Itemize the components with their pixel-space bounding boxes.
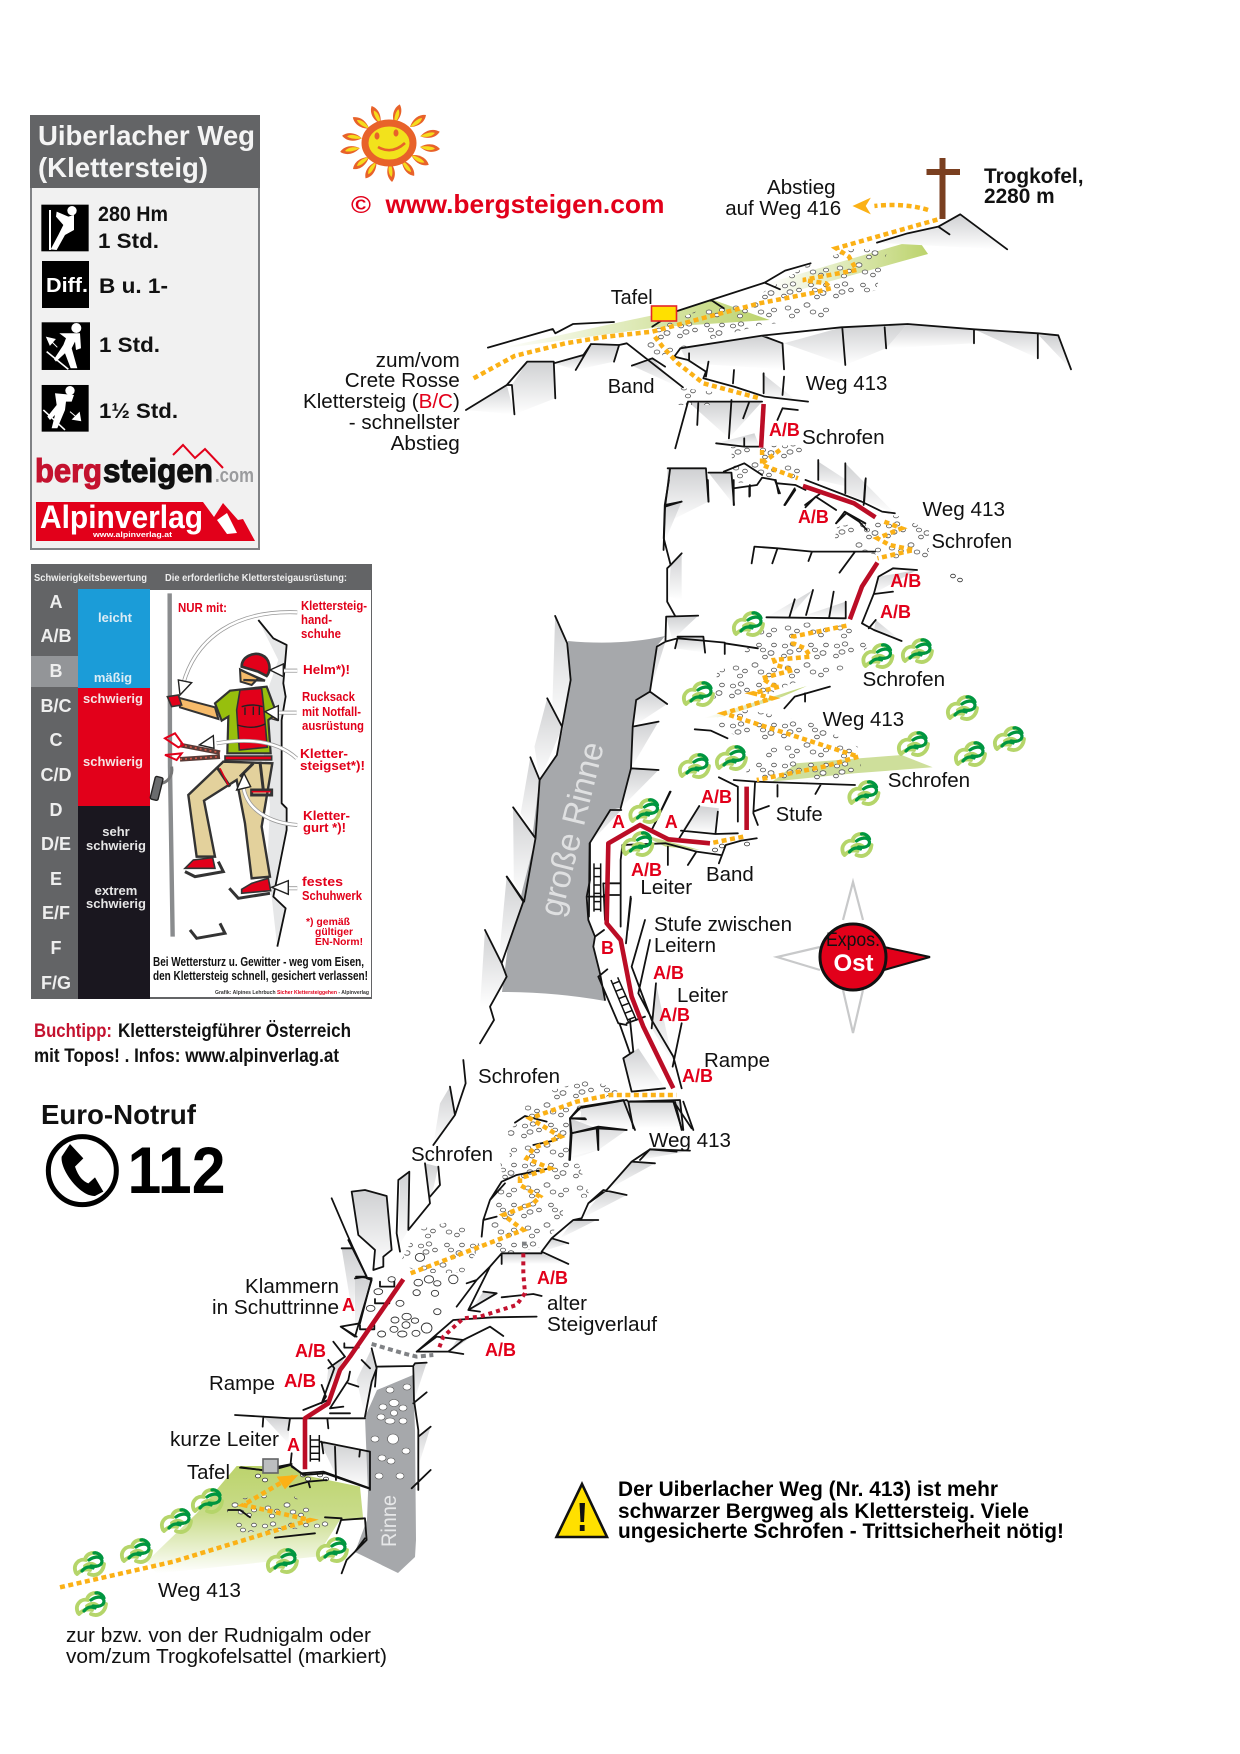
rock shading, bottom section bbox=[263, 1278, 431, 1490]
label: Stufe: Stufe bbox=[776, 803, 823, 826]
warning text: ungesicherte Schrofen - Trittsicherheit nötig! bbox=[618, 1520, 1064, 1543]
equipment labels: gültiger bbox=[315, 927, 353, 938]
icon: gray sign bbox=[263, 1459, 278, 1473]
equipment labels: NUR mit: bbox=[178, 600, 227, 615]
label: access note: zur bzw. von der Rudnigalm oder bbox=[66, 1624, 371, 1647]
logo: Alpinverlag bbox=[36, 499, 255, 541]
gully: große Rinne: große Rinne bbox=[532, 738, 611, 920]
label: Abstieg auf Weg 416: Abstieg bbox=[767, 176, 836, 199]
website link: © bbox=[351, 192, 371, 219]
rock wall bbox=[258, 620, 287, 947]
grade column: A/B bbox=[40, 626, 72, 646]
grade: A/B: A/B bbox=[295, 1341, 326, 1361]
arrows to equipment bbox=[178, 612, 297, 894]
via ferrata rungs bbox=[185, 862, 270, 938]
route: yellow path at start bbox=[60, 1475, 310, 1587]
icon: difficulty bbox=[42, 261, 89, 308]
icon: difficulty: Diff. bbox=[46, 275, 88, 297]
label: Schrofen: Schrofen bbox=[411, 1143, 493, 1166]
equipment area bbox=[150, 590, 371, 997]
book tip bbox=[34, 1021, 351, 1067]
label: Abstieg auf Weg 416: auf Weg 416 bbox=[725, 197, 841, 220]
lanyard bbox=[165, 733, 220, 760]
green meadow at start bbox=[147, 1466, 363, 1573]
label: Weg 413: Weg 413 bbox=[922, 498, 1005, 521]
equipment labels: Kletter- bbox=[300, 746, 348, 761]
large boulders in scree gully bbox=[366, 1253, 458, 1337]
label: Weg 413: Weg 413 bbox=[158, 1579, 241, 1602]
band: sehr / extrem schwierig: sehr bbox=[102, 824, 130, 839]
route: yellow path, lower sections bbox=[411, 1095, 677, 1273]
rock outlines and clamps, bottom section bbox=[235, 1240, 431, 1490]
icon: descent bbox=[42, 385, 89, 432]
rock outlines, upper section bbox=[466, 214, 1071, 550]
logo: bergsteigen.com: .com bbox=[215, 465, 254, 487]
rock outlines, base section bbox=[228, 1465, 368, 1573]
label: Stufe zwischen Leitern: Stufe zwischen bbox=[654, 913, 792, 936]
secured section main bbox=[607, 787, 747, 1088]
lower gully: Rinne bbox=[355, 1375, 416, 1573]
grade column: C/D bbox=[40, 765, 72, 785]
grade column: B bbox=[50, 661, 62, 681]
label: Crete Rosse connection: Klettersteig (B/C) bbox=[303, 390, 460, 413]
grade: A/B: A/B bbox=[798, 507, 829, 527]
label: access note: vom/zum Trogkofelsattel (markiert) bbox=[66, 1645, 387, 1668]
equipment labels: *) gemäß bbox=[306, 917, 350, 928]
label: Klammern in Schuttrinne: Klammern bbox=[245, 1275, 339, 1298]
grade: A/B: A/B bbox=[890, 571, 921, 591]
upper body bbox=[167, 654, 278, 760]
equipment labels: Kletter- bbox=[303, 808, 350, 823]
graphic credit: Grafik: Alpines Lehrbuch Sicher Klettersteiggehen - Alpinverlag bbox=[215, 990, 369, 996]
compass: exposure east: Expos. bbox=[826, 930, 880, 951]
steel cable bbox=[150, 593, 173, 937]
band: sehr / extrem schwierig: extrem bbox=[95, 883, 137, 898]
logo: Alpinverlag: Alpinverlag bbox=[40, 499, 203, 535]
label: Tafel: Tafel bbox=[187, 1461, 230, 1484]
icon: phone bbox=[48, 1137, 116, 1205]
logo: bergsteigen.com: berg bbox=[35, 452, 102, 489]
grade: A/B: A/B bbox=[631, 860, 662, 880]
label: Rampe: Rampe bbox=[704, 1049, 770, 1072]
grade: A: A bbox=[612, 812, 625, 832]
equipment labels: hand- bbox=[301, 612, 332, 627]
grade: A/B: A/B bbox=[659, 1005, 690, 1025]
warning text: Der Uiberlacher Weg (Nr. 413) ist mehr bbox=[618, 1478, 998, 1501]
storm warning: Bei Wettersturz u. Gewitter - weg vom Eisen, bbox=[153, 955, 364, 969]
label: Crete Rosse connection: Abstieg bbox=[391, 432, 460, 455]
grade column: A bbox=[50, 592, 62, 612]
label: Band upper: Band bbox=[608, 375, 654, 398]
label: Schrofen: Schrofen bbox=[932, 530, 1012, 553]
band: schwierig bbox=[78, 688, 150, 806]
label: Stufe zwischen Leitern: Leitern bbox=[654, 934, 716, 957]
grade: A/B: A/B bbox=[537, 1268, 568, 1288]
grade: A/B: A/B bbox=[769, 420, 800, 440]
route: yellow path to ledge bbox=[713, 837, 743, 843]
grade: A/B: A/B bbox=[653, 963, 684, 983]
bushes bbox=[75, 613, 1024, 1615]
band: sehr / extrem schwierig: schwierig bbox=[86, 838, 146, 853]
difficulty value: B u. 1- bbox=[99, 275, 168, 298]
equipment labels bbox=[178, 598, 367, 948]
label: Leiter: Leiter bbox=[677, 984, 728, 1007]
equipment labels: Rucksack bbox=[302, 689, 356, 704]
panel header bar bbox=[30, 115, 260, 188]
label: summit name: Trogkofel, bbox=[984, 165, 1084, 188]
band: schwierig: schwierig bbox=[83, 691, 143, 706]
label: Crete Rosse connection: zum/vom bbox=[376, 349, 460, 372]
panel base bbox=[31, 564, 372, 999]
header: difficulty rating: Schwierigkeitsbewertung bbox=[34, 572, 147, 584]
band: sehr / extrem schwierig: schwierig bbox=[86, 896, 146, 911]
gully: große Rinne bbox=[502, 636, 665, 1001]
topo map bbox=[60, 158, 1071, 1615]
label: Rampe: Rampe bbox=[209, 1372, 275, 1395]
band: leicht / mäßig bbox=[78, 589, 150, 688]
scree fields bbox=[227, 248, 962, 1533]
panel: difficulty scale and equipment bbox=[31, 564, 372, 999]
grade: A: A bbox=[665, 812, 678, 832]
ascent stats: 1 Std. bbox=[98, 230, 159, 253]
label: summit name: 2280 m bbox=[984, 185, 1055, 208]
lower gully: Rinne: Rinne bbox=[378, 1495, 401, 1547]
logo: bergsteigen.com: steigen bbox=[103, 452, 213, 489]
route: yellow path, summit section bbox=[474, 219, 938, 478]
grade: A: A bbox=[287, 1435, 300, 1455]
equipment labels: schuhe bbox=[301, 626, 341, 641]
panel frame bbox=[31, 116, 259, 549]
label: alter Steigverlauf: alter bbox=[547, 1292, 587, 1315]
grade: A/B: A/B bbox=[485, 1340, 516, 1360]
label: Weg 413: Weg 413 bbox=[823, 708, 904, 731]
label: Crete Rosse connection: Crete Rosse bbox=[345, 369, 460, 392]
legs bbox=[185, 762, 272, 893]
equipment labels: gurt *)! bbox=[303, 820, 346, 835]
website link: www.bergsteigen.com bbox=[384, 189, 664, 219]
equipment labels: EN-Norm! bbox=[315, 937, 363, 948]
equipment labels: Klettersteig- bbox=[301, 598, 367, 613]
grade: B: B bbox=[601, 938, 614, 958]
label: Schrofen: Schrofen bbox=[802, 426, 885, 449]
grade: A/B: A/B bbox=[880, 602, 911, 622]
rock shading, lower section bbox=[342, 1087, 682, 1353]
icon: climbing bbox=[41, 205, 89, 251]
equipment labels: ausrüstung bbox=[302, 718, 364, 733]
rock shading, upper section bbox=[466, 214, 1071, 523]
band: sehr / extrem schwierig bbox=[78, 806, 150, 999]
route: old path (dotted) bbox=[372, 1242, 527, 1357]
label: Weg 413: Weg 413 bbox=[649, 1129, 731, 1152]
logo: Alpinverlag: www.alpinverlag.at bbox=[92, 530, 173, 539]
grade column: F bbox=[50, 938, 62, 958]
secured section middle bbox=[850, 563, 877, 619]
book tip: mit Topos! . Infos: www.alpinverlag.at bbox=[34, 1046, 340, 1067]
grade: A/B: A/B bbox=[284, 1371, 316, 1391]
rock shading, lower-middle section bbox=[480, 877, 690, 1160]
label: alter Steigverlauf: Steigverlauf bbox=[547, 1313, 657, 1336]
secured section upper bbox=[761, 404, 875, 517]
compass: exposure east: Ost bbox=[833, 950, 874, 977]
summit cross bbox=[926, 158, 960, 219]
ladders bbox=[594, 863, 637, 1023]
grade column: B/C bbox=[40, 696, 72, 716]
rock shading, middle section bbox=[513, 502, 917, 897]
warning text: schwarzer Bergweg als Klettersteig. Viele bbox=[618, 1500, 1029, 1523]
route: yellow path, middle section bbox=[724, 522, 914, 780]
equipment labels: Helm*)! bbox=[303, 662, 350, 677]
secured section lower bbox=[305, 1279, 403, 1469]
logo: bergsteigen.com bbox=[35, 445, 254, 489]
label: Tafel top: Tafel bbox=[611, 286, 653, 309]
rock outlines, lower-middle section bbox=[480, 792, 693, 1160]
grade column: E/F bbox=[42, 903, 70, 923]
equipment labels: steigset*)! bbox=[300, 758, 365, 773]
band: leicht / mäßig: leicht bbox=[98, 610, 133, 625]
grade: A/B: A/B bbox=[682, 1066, 713, 1086]
label: Schrofen: Schrofen bbox=[888, 769, 970, 792]
label: Schrofen: Schrofen bbox=[478, 1065, 560, 1088]
rock outlines, lower section bbox=[332, 1060, 692, 1354]
icon: yellow sign bbox=[652, 306, 676, 321]
book tip: Klettersteigführer Österreich bbox=[118, 1021, 351, 1042]
icon: approach bbox=[42, 322, 90, 370]
grade column: E bbox=[50, 869, 62, 889]
grade: A: A bbox=[342, 1295, 355, 1315]
emergency number: 112 bbox=[128, 1133, 226, 1207]
book tip: Buchtipp: bbox=[34, 1021, 112, 1042]
label: Leiter: Leiter bbox=[640, 876, 692, 899]
panel title: (Klettersteig) bbox=[38, 152, 208, 183]
grade column: D bbox=[50, 800, 62, 820]
label: Schrofen: Schrofen bbox=[862, 668, 945, 691]
band: schwierig: schwierig bbox=[83, 754, 143, 769]
equipment labels: festes bbox=[302, 874, 343, 889]
panel: route summary bbox=[30, 115, 260, 549]
green ledges, middle section bbox=[638, 686, 933, 850]
band: leicht / mäßig: mäßig bbox=[94, 670, 132, 685]
grade column: F/G bbox=[41, 973, 71, 993]
rock outlines, middle section bbox=[507, 480, 917, 930]
emergency call heading: Euro-Notruf bbox=[41, 1099, 197, 1130]
header: equipment: Die erforderliche Klettersteigausrüstung: bbox=[165, 572, 347, 584]
compass: exposure east bbox=[777, 882, 930, 1033]
equipment labels: Schuhwerk bbox=[302, 888, 363, 903]
storm warning: den Klettersteig schnell, gesichert verlassen! bbox=[153, 969, 368, 983]
label: Weg 413: Weg 413 bbox=[806, 372, 887, 395]
icon: sun logo bbox=[339, 103, 441, 182]
icon: warning triangle bbox=[556, 1484, 607, 1537]
grade column: D/E bbox=[41, 834, 71, 854]
label: kurze Leiter: kurze Leiter bbox=[170, 1428, 279, 1451]
label: Band: Band bbox=[706, 863, 754, 886]
highlighted grade B bbox=[31, 656, 78, 687]
descent time: 1½ Std. bbox=[99, 400, 178, 423]
route: descent arrow bbox=[852, 198, 928, 214]
climber illustration bbox=[150, 593, 297, 947]
label: Crete Rosse connection: - schnellster bbox=[349, 411, 460, 434]
grade: A/B: A/B bbox=[701, 787, 732, 807]
grade column: C bbox=[50, 730, 62, 750]
ascent stats: 280 Hm bbox=[98, 203, 168, 226]
equipment labels: mit Notfall- bbox=[302, 704, 361, 719]
route: red secured sections bbox=[305, 404, 877, 1469]
approach time: 1 Std. bbox=[99, 334, 160, 357]
label: Klammern in Schuttrinne: in Schuttrinne bbox=[212, 1296, 339, 1319]
panel title: Uiberlacher Weg bbox=[38, 120, 255, 151]
green ledges, upper section bbox=[499, 239, 928, 348]
grade column bbox=[40, 592, 72, 993]
